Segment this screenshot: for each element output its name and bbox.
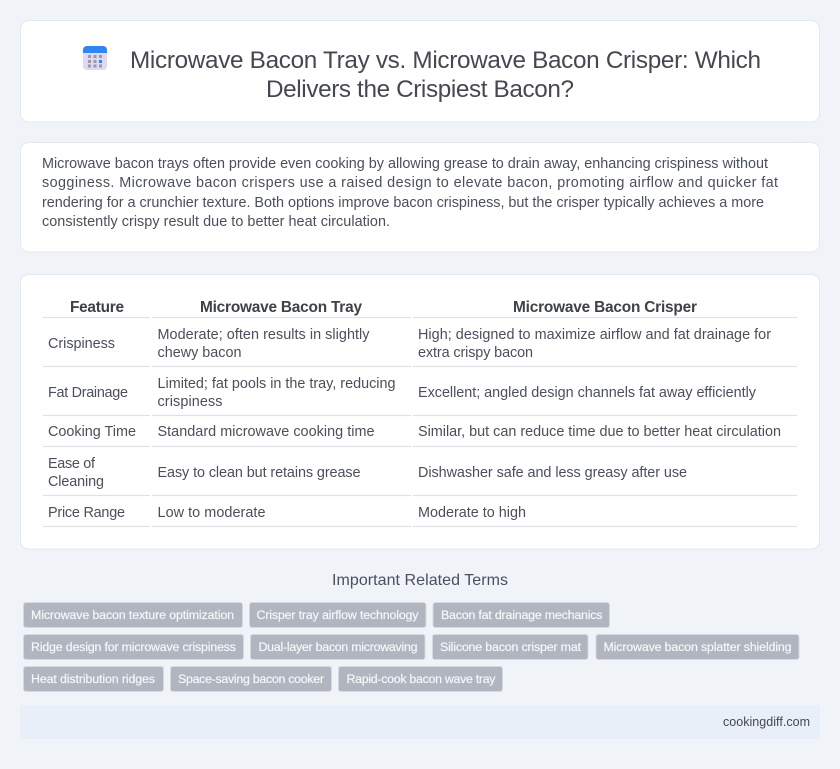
table header row: Microwave Bacon Tray [200,299,362,316]
row: cooking time [48,424,781,440]
tag: Silicone bacon crisper mat [440,640,582,654]
panel: comparison table [20,274,820,549]
tag [170,666,332,692]
row: cooking time: Cooking Time [48,424,136,440]
intro text: consistently crispy result due to better heat circulation. [42,214,390,230]
tag: Microwave bacon texture optimization [31,608,234,622]
table header row [70,299,697,316]
heading: important related terms: Important Related Terms [332,572,508,589]
tags: related terms [24,602,799,692]
row: crispiness: Crispiness [48,336,115,352]
table header row: Feature [70,299,124,316]
footer source text: cookingdiff.com [723,715,810,729]
tag [24,602,242,628]
row: ease of cleaning: Cleaning [48,474,104,490]
row: crispiness: extra crispy bacon [418,345,533,361]
intro text: Microwave bacon trays often provide even cooking by allowing grease to drain away, enhancing crispiness without [42,156,768,172]
row: fat drainage: Excellent; angled design channels fat away efficiently [418,385,757,401]
row: price range: Low to moderate [158,505,266,521]
table grid lines [43,318,797,526]
tag: Crisper tray airflow technology [256,608,419,622]
intro text [42,156,778,230]
row: ease of cleaning [48,456,687,490]
tag: Bacon fat drainage mechanics [441,608,602,622]
row: crispiness: chewy bacon [158,345,242,361]
tag [432,634,588,660]
row: cooking time: Standard microwave cooking time [158,424,374,440]
tag [24,634,244,660]
intro text: rendering for a crunchier texture. Both options improve bacon crispiness, but the crisper typically achieves a more [42,195,764,211]
footer bar [20,705,820,739]
title text: Microwave Bacon Tray vs. Microwave Bacon Crisper: Which [130,47,761,74]
panel: title [20,20,820,122]
tag [250,634,425,660]
tag: Microwave bacon splatter shielding [604,640,792,654]
tag: Dual-layer bacon microwaving [258,640,418,654]
row: crispiness: High; designed to maximize airflow and fat drainage for [418,327,771,343]
row: crispiness: Moderate; often results in slightly [158,327,370,343]
tag [24,666,164,692]
row: ease of cleaning: Dishwasher safe and less greasy after use [418,465,687,481]
row: fat drainage [48,376,757,410]
row: ease of cleaning: Ease of [48,456,96,472]
row: cooking time: Similar, but can reduce time due to better heat circulation [418,424,781,440]
tag [433,602,610,628]
row: fat drainage: Fat Drainage [48,385,128,401]
tag: Heat distribution ridges [31,672,155,686]
title text: Delivers the Crispiest Bacon? [266,76,574,103]
intro text: sogginess. Microwave bacon crispers use a raised design to elevate bacon, promoting airflow and quicker fat [42,175,778,191]
panel: intro paragraph [20,142,820,252]
row: fat drainage: crispiness [158,394,222,410]
row: crispiness [48,327,771,361]
table header row: Microwave Bacon Crisper [513,299,697,316]
tag: Ridge design for microwave crispiness [31,640,236,654]
title text [130,47,761,103]
icon: calendar grid [83,46,107,70]
row: fat drainage: Limited; fat pools in the tray, reducing [158,376,396,392]
tag: Space-saving bacon cooker [178,672,324,686]
row: ease of cleaning: Easy to clean but retains grease [158,465,360,481]
row: price range [48,505,526,521]
row: price range: Moderate to high [418,505,526,521]
row: price range: Price Range [48,505,125,521]
tag [596,634,799,660]
tag [338,666,502,692]
tag [250,602,426,628]
tag: Rapid-cook bacon wave tray [346,672,496,686]
